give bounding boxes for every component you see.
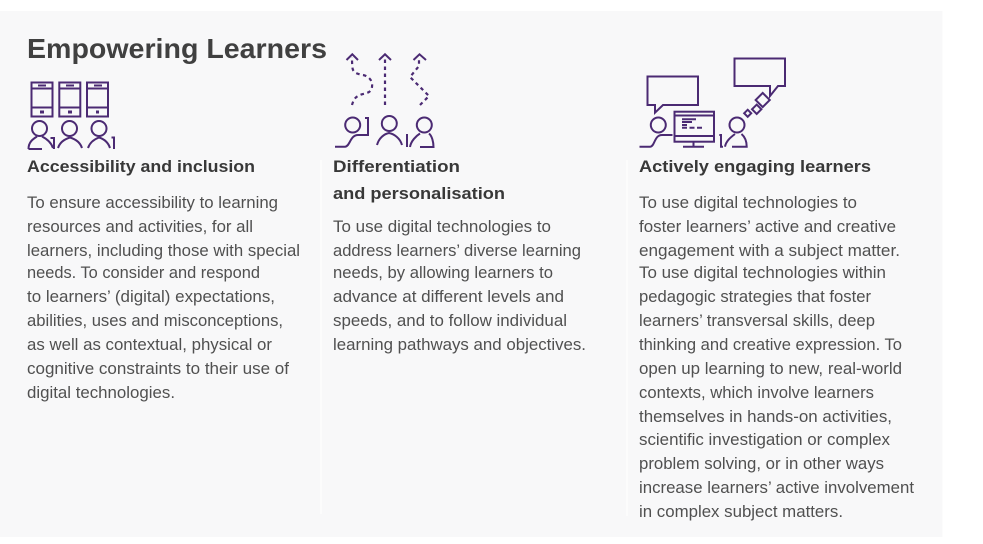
text block: accessibility and inclusion: cognitive constraints to their use of bbox=[27, 359, 289, 378]
text block: differentiation and personalisation: To use digital technologies to bbox=[333, 217, 551, 236]
text block: accessibility and inclusion: resources and activities, for all bbox=[27, 217, 253, 236]
text block: differentiation and personalisation bbox=[333, 217, 586, 354]
text block: actively engaging learners: scientific investigation or complex bbox=[639, 430, 890, 449]
text block: actively engaging learners: To use digital technologies within bbox=[639, 263, 886, 282]
text block: accessibility and inclusion: to learners’ (digital) expectations, bbox=[27, 287, 275, 306]
text block: actively engaging learners: engagement with a subject matter. bbox=[639, 241, 900, 260]
text block: differentiation and personalisation: needs, by allowing learners to bbox=[333, 263, 553, 282]
heading: actively engaging learners: Actively engaging learners bbox=[639, 157, 871, 176]
text block: actively engaging learners: foster learners’ active and creative bbox=[639, 217, 896, 236]
text block: actively engaging learners: open up learning to new, real-world bbox=[639, 359, 902, 378]
text block: differentiation and personalisation: speeds, and to follow individual bbox=[333, 311, 567, 330]
heading: differentiation and personalisation: and personalisation bbox=[333, 184, 505, 203]
text block: differentiation and personalisation: advance at different levels and bbox=[333, 287, 564, 306]
text block: actively engaging learners: pedagogic strategies that foster bbox=[639, 287, 871, 306]
text block: actively engaging learners: themselves in hands-on activities, bbox=[639, 407, 892, 426]
icon: phones and learners bbox=[28, 82, 114, 149]
text block: actively engaging learners: learners’ transversal skills, deep bbox=[639, 311, 875, 330]
text block: accessibility and inclusion: To ensure accessibility to learning bbox=[27, 193, 278, 212]
text block: accessibility and inclusion bbox=[27, 193, 300, 402]
text block: differentiation and personalisation: address learners’ diverse learning bbox=[333, 241, 581, 260]
text block: actively engaging learners: problem solving, or in other ways bbox=[639, 454, 884, 473]
text block: accessibility and inclusion: needs. To consider and respond bbox=[27, 263, 260, 282]
text block: accessibility and inclusion: digital technologies. bbox=[27, 383, 175, 402]
text block: actively engaging learners: To use digital technologies to bbox=[639, 193, 857, 212]
heading: differentiation and personalisation bbox=[333, 157, 505, 203]
text block: actively engaging learners: in complex subject matters. bbox=[639, 502, 843, 521]
text block: differentiation and personalisation: learning pathways and objectives. bbox=[333, 335, 586, 354]
icon: learners with individual pathways bbox=[335, 54, 434, 147]
text block: accessibility and inclusion: abilities, uses and misconceptions, bbox=[27, 311, 283, 330]
text block: actively engaging learners bbox=[639, 193, 914, 521]
heading: accessibility and inclusion: Accessibility and inclusion bbox=[27, 157, 255, 176]
text block: actively engaging learners: increase learners’ active involvement bbox=[639, 478, 914, 497]
heading: differentiation and personalisation: Differentiation bbox=[333, 157, 460, 176]
text block: actively engaging learners: contexts, which involve learners bbox=[639, 383, 874, 402]
title: Empowering Learners bbox=[27, 33, 327, 64]
text block: actively engaging learners: thinking and creative expression. To bbox=[639, 335, 902, 354]
text block: accessibility and inclusion: learners, including those with special bbox=[27, 241, 300, 260]
text block: accessibility and inclusion: as well as contextual, physical or bbox=[27, 335, 272, 354]
icon: learners engaging with screen and speech bubbles bbox=[640, 58, 785, 147]
